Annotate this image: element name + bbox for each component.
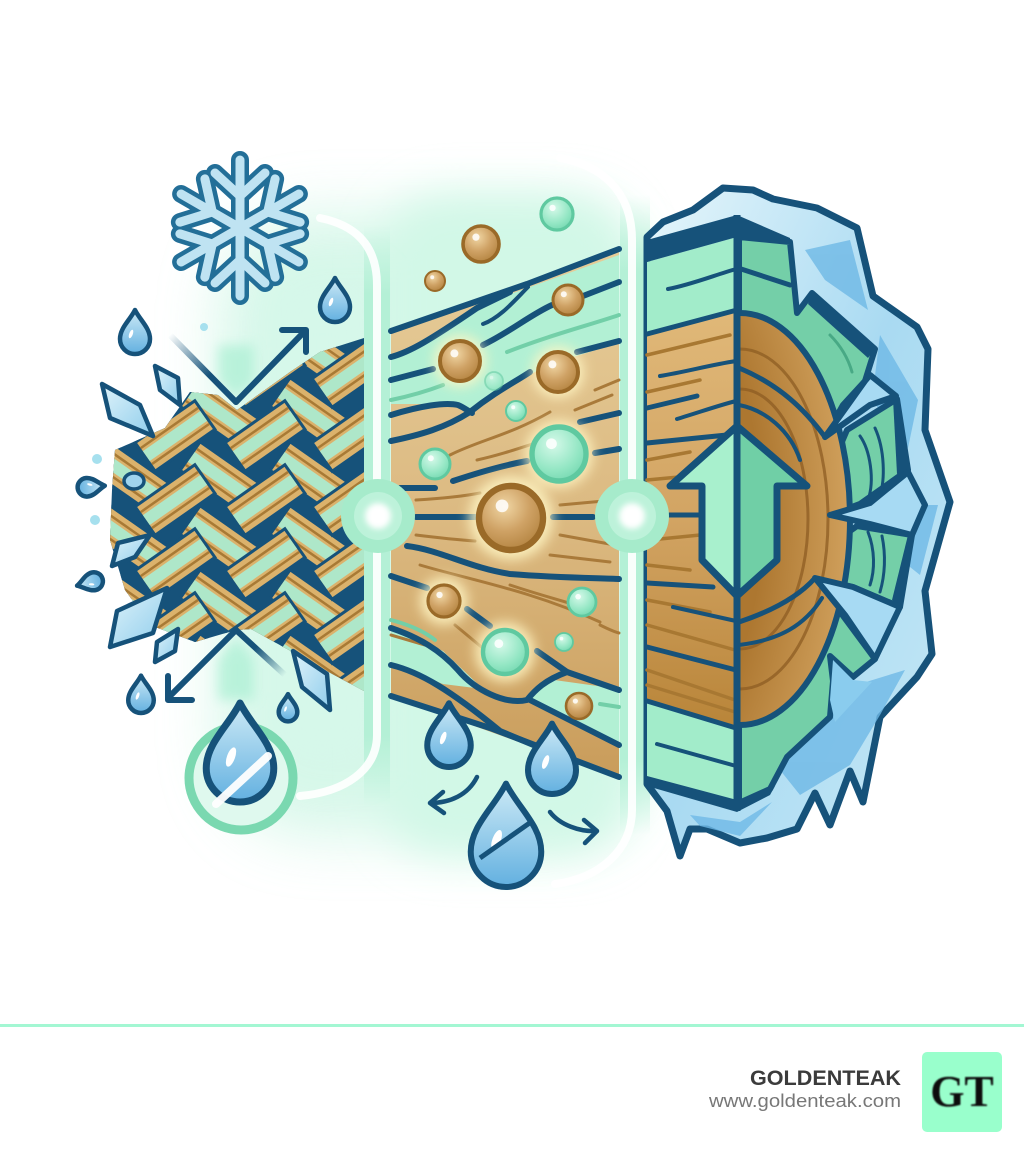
node: right <box>595 479 669 553</box>
small water drops and dots <box>75 278 350 721</box>
panel: woven wood fibre <box>75 278 394 729</box>
panel: central wood with particles <box>391 198 619 887</box>
logo: GT badge: GT <box>930 1067 994 1116</box>
green left face bottom <box>647 700 737 800</box>
particle glows <box>420 335 593 682</box>
navy arcs on end face <box>739 368 825 645</box>
vertical corner line <box>734 215 740 811</box>
arrow: bottom chevron <box>168 630 285 700</box>
navy grain lines <box>391 249 619 777</box>
footer brand text <box>708 1067 901 1111</box>
navy bottom band <box>647 776 775 812</box>
panel: frozen wood block <box>630 188 950 856</box>
background green glow <box>220 195 650 855</box>
ice spikes <box>815 375 925 659</box>
wood end grain chunks <box>739 237 912 803</box>
ice crust <box>647 188 950 856</box>
panel dividers <box>300 158 632 884</box>
water drops under wood <box>427 703 576 794</box>
footer brand text: www.goldenteak.com <box>708 1091 901 1111</box>
end grain lines on chunks <box>738 268 884 592</box>
weave lattice <box>110 338 364 691</box>
ice shards <box>102 366 330 710</box>
glow behind bottom chevron <box>218 636 254 700</box>
end spike <box>830 660 872 722</box>
particles: green spheres <box>420 198 596 674</box>
footer brand text: GOLDENTEAK <box>750 1067 901 1090</box>
left face grain <box>647 335 735 712</box>
particles: amber spheres <box>425 226 592 719</box>
green left face <box>647 237 737 340</box>
arrow: curved right <box>550 812 597 843</box>
navy top band <box>647 215 792 262</box>
darker green accents <box>391 315 619 707</box>
glow behind top chevron <box>218 345 254 399</box>
node: left <box>341 479 415 553</box>
icon: crossed drop <box>471 784 541 887</box>
icon: crossed-out water drop in ring <box>189 703 293 830</box>
wood end face rings <box>740 310 853 728</box>
wood base <box>391 250 619 778</box>
icon: snowflake <box>169 160 311 296</box>
logo: GT badge <box>922 1052 1002 1132</box>
arrow: curved left <box>430 777 477 813</box>
ice shading <box>690 240 938 836</box>
arrow: upward central <box>670 426 807 596</box>
wood left face <box>647 312 737 726</box>
footer rule <box>0 1024 1024 1027</box>
green upper band <box>391 255 619 408</box>
arrow: top chevron <box>170 330 306 402</box>
left face navy lines <box>647 269 737 766</box>
wood grain <box>391 380 619 770</box>
green lower band <box>391 628 619 745</box>
navy chunk shadows <box>808 293 912 607</box>
